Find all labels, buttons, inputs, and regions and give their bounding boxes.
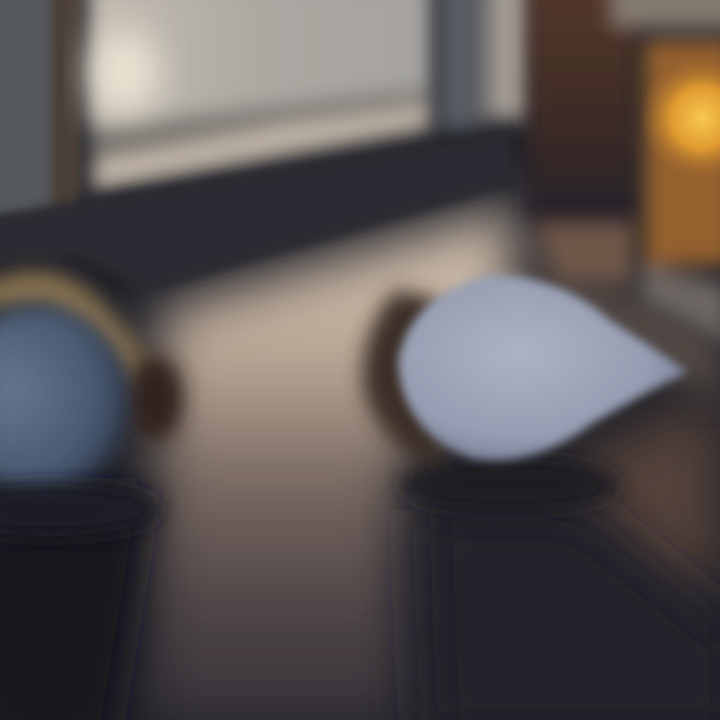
window: left frame bbox=[0, 0, 80, 220]
left bowl: dark brown base bbox=[127, 356, 183, 440]
window sill: dark band bbox=[0, 132, 520, 292]
table: lit centre strip bbox=[150, 205, 520, 720]
right bowl: dark rim and shadow bbox=[363, 290, 620, 511]
glass: dark brown tumbler bbox=[528, 0, 636, 285]
right bowl: pale blue stone bbox=[398, 275, 688, 461]
glass: amber candle holder bbox=[610, 0, 720, 345]
window: bright panes bbox=[88, 0, 433, 192]
table: dark lower-left shadow bbox=[0, 490, 150, 720]
table: right edge beyond stone bbox=[500, 230, 720, 400]
window: right frame and bright strip bbox=[438, 0, 532, 130]
table: dark lower-right shadow bbox=[420, 510, 720, 720]
left bowl: blue-grey interior bbox=[0, 306, 128, 494]
left bowl: dark shadow below bbox=[0, 484, 160, 536]
window: pane highlight bbox=[91, 30, 159, 114]
left bowl: golden rim bbox=[0, 271, 160, 385]
table: brown lower-right area bbox=[560, 390, 720, 600]
glass: candle glow bbox=[640, 56, 720, 180]
